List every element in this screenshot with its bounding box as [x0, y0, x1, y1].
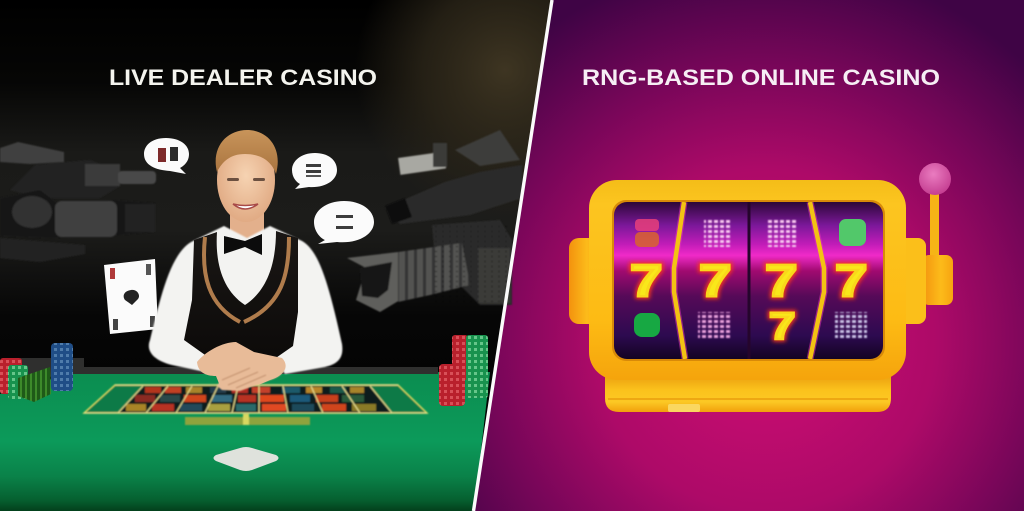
- chip stacks right: [439, 335, 488, 406]
- dealer smile: [233, 204, 258, 209]
- dealer red chair: [292, 318, 305, 350]
- dealer hair: [216, 130, 278, 174]
- heading: RNG-based online casino: RNG-BASED ONLINE CASINO: [582, 65, 940, 90]
- sevens: 7: [769, 305, 795, 348]
- sevens: 7: [765, 256, 798, 306]
- dealer vest trim: [204, 237, 289, 322]
- lever: [919, 163, 953, 305]
- symbol row top: [635, 219, 659, 231]
- speech bubble: top right: [292, 153, 337, 189]
- slot machine: [569, 163, 953, 412]
- dealer face: [217, 138, 275, 222]
- seven glow: 7: [630, 256, 663, 306]
- dealer fingers over layout: [217, 358, 285, 391]
- dealer vest: [184, 231, 298, 362]
- seven glow: 7: [835, 256, 868, 306]
- panel: live dealer casino background: [0, 0, 560, 511]
- chip stacks left: [0, 343, 73, 402]
- sevens: 7: [699, 256, 732, 306]
- icon: broadcast cameras left: [0, 142, 156, 262]
- heading: live dealer casino: LIVE DEALER CASINO: [109, 65, 377, 90]
- dealer neck: [230, 208, 264, 242]
- reel dividers: [674, 202, 685, 359]
- table rail: [20, 358, 438, 378]
- symbol row bottom: [634, 313, 660, 337]
- screen: [614, 202, 883, 359]
- roulette layout: [84, 385, 427, 425]
- felt table: [0, 358, 490, 511]
- sevens: 7: [835, 256, 868, 306]
- side panels: [569, 238, 926, 324]
- speech bubble: lower right: [314, 201, 374, 244]
- seven glow: [630, 256, 868, 348]
- dealer shirt and arms: [149, 226, 342, 374]
- sevens: [630, 264, 867, 340]
- dealer bow tie: [224, 234, 262, 255]
- panel: RNG online casino background: [474, 0, 1024, 511]
- white pad on table: [214, 447, 278, 471]
- base: [605, 372, 891, 412]
- playing card: [104, 259, 158, 334]
- seven glow: 7: [765, 256, 798, 306]
- dealer: [149, 130, 342, 391]
- sevens: 7: [630, 256, 663, 306]
- dealer eyes: [227, 178, 239, 181]
- seven glow: 7: [769, 305, 795, 348]
- dealer hands: [197, 342, 286, 391]
- icon: broadcast cameras right: [347, 130, 522, 312]
- speech bubble: top left: [144, 138, 189, 174]
- seven glow: 7: [699, 256, 732, 306]
- cabinet frame: [589, 180, 906, 380]
- divider line: [474, 0, 552, 511]
